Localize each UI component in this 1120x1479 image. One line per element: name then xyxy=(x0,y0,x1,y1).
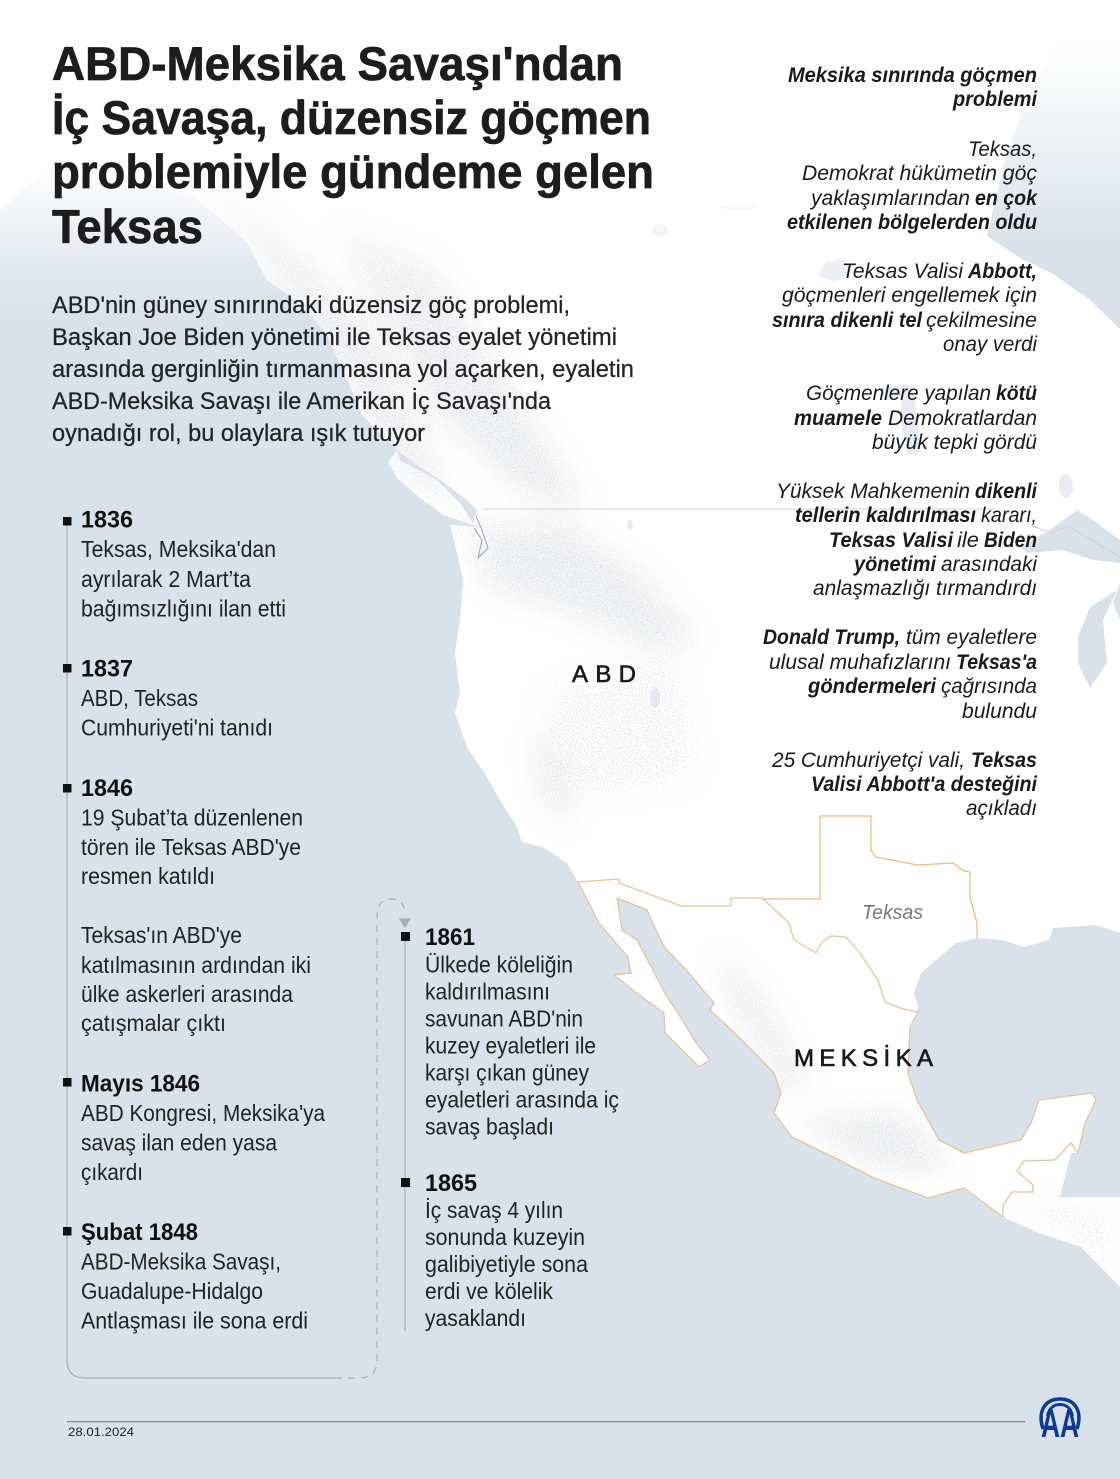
note: Supreme Court: yönetimi xyxy=(853,552,937,576)
event 1837: 1837 xyxy=(81,656,133,682)
event 1837 xyxy=(63,656,273,740)
note: Democrats' reaction: kötü xyxy=(996,381,1037,405)
footer rule xyxy=(67,1421,1025,1422)
note: Texas most affected: Demokrat hükümetin göç xyxy=(802,161,1037,185)
event 1836: 1836 xyxy=(81,506,133,534)
event 1846: resmen katıldı xyxy=(81,863,215,889)
icon: AA logo: AA xyxy=(1041,1402,1079,1446)
title: İç Savaşa, düzensiz göçmen xyxy=(52,91,651,144)
title xyxy=(52,37,654,253)
event Mayıs 1846: Mayıs 1846 xyxy=(81,1070,200,1098)
note: Donald Trump: çağrısında xyxy=(941,674,1037,698)
event 1861: 1861 xyxy=(425,924,475,951)
Hudson Bay xyxy=(987,40,1120,329)
note: Democrats' reaction: muamele xyxy=(794,406,882,430)
note: Republican governors: açıkladı xyxy=(966,796,1037,820)
date: 28.01.2024 xyxy=(68,1427,135,1439)
note: Supreme Court: Biden xyxy=(984,528,1037,552)
event 1861: Ülkede köleliğin xyxy=(425,952,573,978)
note: Donald Trump: tüm eyaletlere xyxy=(906,625,1037,649)
intro paragraph: oynadığı rol, bu olaylara ışık tutuyor xyxy=(52,420,425,447)
note: Abbott razor wire xyxy=(772,259,1038,356)
event Şubat 1848: Antlaşması ile sona erdi xyxy=(81,1308,308,1334)
note: Democrats' reaction xyxy=(794,381,1037,454)
event Mayıs 1846: çıkardı xyxy=(81,1159,143,1185)
map label: Teksas: Teksas xyxy=(862,902,923,924)
Mexico outline xyxy=(578,879,1096,1217)
timeline column one xyxy=(63,506,325,1334)
note: Donald Trump xyxy=(763,625,1037,723)
note: Abbott razor wire: çekilmesine xyxy=(926,308,1037,332)
note: Abbott razor wire: göçmenleri engellemek için xyxy=(782,283,1037,307)
event Şubat 1848: ABD-Meksika Savaşı, xyxy=(81,1248,281,1274)
note: Texas most affected: Teksas, xyxy=(968,137,1037,161)
note heading: problemi xyxy=(952,87,1038,111)
event 1846: katılmasının ardından iki xyxy=(81,952,311,978)
note: Supreme Court: anlaşmazlığı tırmandırdı xyxy=(813,576,1037,600)
intro paragraph: Başkan Joe Biden yönetimi ile Teksas eyalet yönetimi xyxy=(52,324,617,351)
fade to white at top xyxy=(0,0,1120,320)
map label: ABD: ABD xyxy=(572,661,636,688)
note: Supreme Court: kararı, xyxy=(981,503,1037,527)
note: Democrats' reaction: Demokratlardan xyxy=(888,406,1037,430)
event 1846: çatışmalar çıktı xyxy=(81,1010,226,1036)
Texas outline xyxy=(762,816,977,938)
Puget Sound shoreline xyxy=(474,516,488,558)
note: Donald Trump: Teksas'a xyxy=(956,650,1037,674)
event 1865: sonunda kuzeyin xyxy=(425,1224,585,1250)
note: Republican governors: Teksas xyxy=(971,748,1037,772)
note: Democrats' reaction: büyük tepki gördü xyxy=(872,430,1037,454)
note: Supreme Court: Teksas Valisi xyxy=(829,528,954,552)
event 1846: Teksas'ın ABD'ye xyxy=(81,922,242,948)
event 1836 xyxy=(63,506,286,622)
note: Supreme Court xyxy=(776,479,1038,600)
map label: Meksika: MEKSİKA xyxy=(794,1045,933,1072)
event 1846: 19 Şubat’ta düzenlenen xyxy=(81,804,303,830)
event 1865: erdi ve kölelik xyxy=(425,1278,553,1304)
event 1865: İç savaş 4 yılın xyxy=(425,1197,563,1223)
note: Supreme Court: ile xyxy=(957,528,979,552)
event 1861: kuzey eyaletleri ile xyxy=(425,1032,596,1058)
inland lakes and straits xyxy=(397,204,1120,708)
note: Republican governors: 25 Cumhuriyetçi vali, xyxy=(771,748,965,772)
event 1865: galibiyetiyle sona xyxy=(425,1251,588,1277)
note: Donald Trump: bulundu xyxy=(962,699,1037,723)
title: ABD-Meksika Savaşı'ndan xyxy=(52,37,623,90)
note: Supreme Court: Yüksek Mahkemenin xyxy=(776,479,970,503)
note: Texas most affected: yaklaşımlarından xyxy=(809,186,970,210)
note: Abbott razor wire: sınıra dikenli tel xyxy=(772,308,923,332)
note: Donald Trump: Donald Trump, xyxy=(763,625,900,649)
note: Abbott razor wire: Abbott, xyxy=(967,259,1037,283)
event 1836: Teksas, Meksika'dan xyxy=(81,536,276,562)
event 1861: kaldırılmasını xyxy=(425,978,550,1004)
note: Donald Trump: ulusal muhafızlarını xyxy=(769,650,951,674)
event 1846: 1846 xyxy=(81,775,133,802)
event 1861: eyaletleri arasında iç xyxy=(425,1086,619,1112)
event 1836: ayrılarak 2 Mart’ta xyxy=(81,566,251,592)
intro paragraph xyxy=(52,292,634,447)
event 1865: 1865 xyxy=(425,1170,477,1197)
event Mayıs 1846: ABD Kongresi, Meksika'ya xyxy=(81,1100,325,1126)
note heading xyxy=(788,63,1038,111)
intro paragraph: arasında gerginliğin tırmanmasına yol açarken, eyaletin xyxy=(52,356,634,383)
event 1861: savaş başladı xyxy=(425,1114,554,1140)
note: Abbott razor wire: onay verdi xyxy=(943,332,1038,356)
event Şubat 1848 xyxy=(63,1219,308,1334)
note: Abbott razor wire: Teksas Valisi xyxy=(842,259,964,283)
event 1861 xyxy=(401,924,619,1140)
note heading: Meksika sınırında göçmen xyxy=(788,63,1037,87)
event Şubat 1848: Şubat 1848 xyxy=(81,1219,198,1246)
note: Republican governors: Valisi Abbott'a desteğini xyxy=(811,772,1038,796)
intro paragraph: ABD'nin güney sınırındaki düzensiz göç problemi, xyxy=(52,292,570,319)
US-Canada border xyxy=(483,509,1120,557)
timeline column two xyxy=(401,924,619,1331)
event Mayıs 1846 xyxy=(63,1070,325,1185)
event 1865 xyxy=(401,1170,588,1331)
event 1846 xyxy=(63,775,311,1036)
title: Teksas xyxy=(52,200,203,253)
event 1837: Cumhuriyeti'ni tanıdı xyxy=(81,714,273,740)
terrain texture xyxy=(212,191,1120,1268)
note: Supreme Court: dikenli xyxy=(975,479,1038,503)
event Şubat 1848: Guadalupe-Hidalgo xyxy=(81,1278,263,1304)
note: Texas most affected: etkilenen bölgelerden oldu xyxy=(787,210,1037,234)
timeline connector left to right xyxy=(67,521,410,1378)
intro paragraph: ABD-Meksika Savaşı ile Amerikan İç Savaşı'nda xyxy=(52,388,552,415)
note: Donald Trump: göndermeleri xyxy=(807,674,937,698)
note: Supreme Court: tellerin kaldırılması xyxy=(795,503,976,527)
event 1865: yasaklandı xyxy=(425,1305,526,1331)
icon: AA logo xyxy=(1041,1399,1079,1446)
event 1846: ülke askerleri arasında xyxy=(81,981,293,1007)
note: Supreme Court: arasındaki xyxy=(941,552,1038,576)
event 1836: bağımsızlığını ilan etti xyxy=(81,596,286,622)
event Mayıs 1846: savaş ilan eden yasa xyxy=(81,1130,277,1156)
event 1861: karşı çıkan güney xyxy=(425,1060,589,1086)
right column: border problem notes xyxy=(763,63,1038,820)
note: Democrats' reaction: Göçmenlere yapılan xyxy=(806,381,991,405)
title: problemiyle gündeme gelen xyxy=(52,145,654,198)
event 1846: tören ile Teksas ABD'ye xyxy=(81,834,301,860)
note: Republican governors xyxy=(771,748,1038,820)
note: Texas most affected xyxy=(787,137,1038,234)
note: Texas most affected: en çok xyxy=(975,186,1038,210)
event 1837: ABD, Teksas xyxy=(81,685,198,711)
event 1861: savunan ABD'nin xyxy=(425,1006,583,1032)
